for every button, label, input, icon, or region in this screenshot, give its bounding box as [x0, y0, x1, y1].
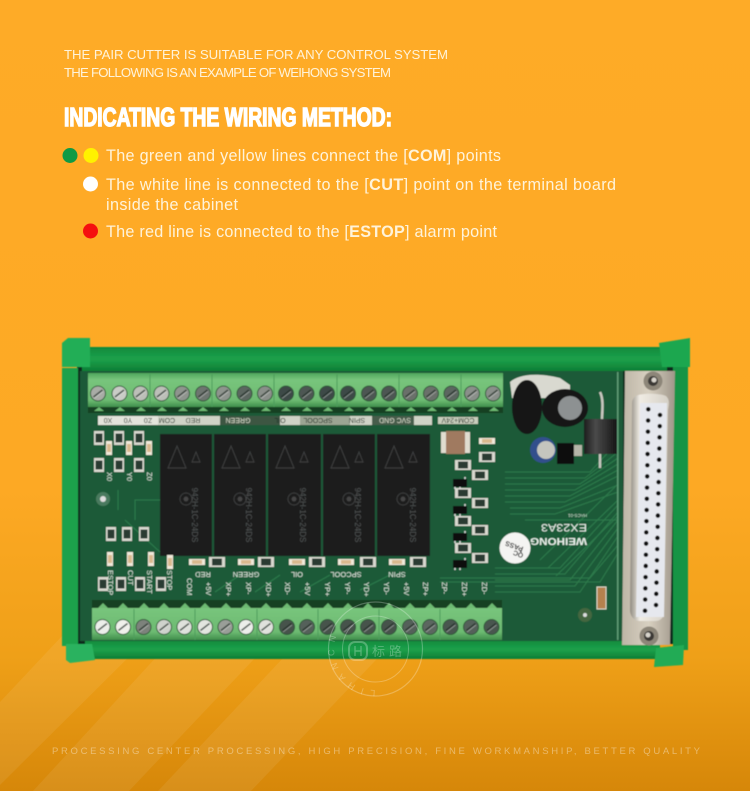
board side labels: YP+	[323, 582, 332, 597]
top label strip: RED	[186, 416, 200, 423]
diode	[584, 419, 617, 454]
pins	[645, 409, 648, 611]
board side labels: STOP	[165, 570, 174, 590]
board side labels: ZP+	[421, 582, 430, 597]
board side labels: X0	[105, 472, 114, 481]
text: red line: The red line is connected to the [ESTOP] alarm point	[106, 223, 498, 241]
board side labels: COM	[185, 578, 194, 596]
text: white line	[106, 176, 616, 214]
white glue	[510, 375, 570, 398]
heading: INDICATING THE WIRING METHOD:	[64, 102, 392, 132]
bottom terminal block	[92, 600, 502, 640]
relays: 942H-1C-24DS	[190, 488, 199, 542]
top label strip	[98, 416, 498, 425]
relays	[160, 434, 430, 556]
board side labels: OIL	[291, 570, 303, 579]
capacitor large	[542, 389, 588, 427]
board side labels: XD-	[283, 582, 292, 595]
relays: 942H-1C-24DS	[244, 488, 253, 542]
connector shell	[630, 394, 669, 621]
board side labels: SPCOOL	[330, 570, 362, 579]
board side labels: START	[145, 570, 154, 594]
board side labels: Y0	[125, 472, 134, 481]
board side labels: Z0	[145, 472, 154, 481]
board side labels: ESTOP	[106, 570, 115, 595]
board side labels	[105, 472, 489, 597]
top label strip: X0	[104, 416, 112, 423]
item: green and yellow lines	[62, 147, 501, 165]
top label strip: SVC GND	[379, 416, 411, 423]
icon: red dot	[83, 224, 98, 238]
power components	[510, 375, 617, 468]
board side labels: +5V	[204, 582, 213, 596]
icon: green dot	[62, 148, 78, 163]
black coil	[512, 380, 542, 434]
teeth	[94, 407, 499, 411]
sticker: QC PASS: PASS	[504, 539, 524, 552]
small electrolytic	[530, 437, 556, 463]
board side labels: ZP-	[440, 582, 449, 595]
board side labels: ZD+	[460, 582, 469, 597]
mounting screws	[644, 372, 662, 390]
board side labels: XP+	[224, 582, 233, 597]
relays: 942H-1C-24DS	[353, 488, 362, 542]
board side labels: RED	[195, 570, 211, 579]
board side labels: XP-	[244, 582, 253, 595]
screws	[94, 619, 500, 635]
top label strip: Y0	[124, 416, 132, 423]
intro text: THE PAIR CUTTER IS SUITABLE FOR ANY CONTROL SYSTEM	[64, 47, 448, 62]
tagline: PROCESSING CENTER PROCESSING, HIGH PRECISION, FINE WORKMANSHIP, BETTER QUALITY	[52, 746, 701, 757]
board logo: EX23A3	[541, 521, 587, 533]
board side labels: YD+	[362, 582, 371, 597]
wiring list	[62, 147, 616, 241]
circuit board	[80, 371, 623, 641]
board side labels: ZD-	[480, 582, 489, 595]
small components	[94, 431, 606, 622]
watermark stamp	[328, 601, 424, 697]
intro text: THE FOLLOWING IS AN EXAMPLE OF WEIHONG SYSTEM	[64, 65, 391, 80]
sticker: QC PASS	[500, 532, 530, 564]
relays: 942H-1C-24DS	[408, 488, 417, 542]
text: white line: The white line is connected to the [CUT] point on the terminal board	[106, 176, 616, 194]
text: white line: inside the cabinet	[106, 196, 238, 214]
top label strip: SPCOOL	[303, 416, 333, 423]
board logo: HACS-01	[567, 513, 587, 518]
green din rail frame	[62, 338, 690, 667]
text: green and yellow lines: The green and yellow lines connect the [COM] points	[106, 147, 501, 165]
screws	[90, 386, 501, 402]
board side labels: GREEN	[233, 570, 259, 579]
top label strip: COM+24V	[441, 416, 474, 423]
SMD chip	[557, 443, 574, 464]
top label strip: Z0	[144, 416, 152, 423]
icon: white dot	[83, 176, 98, 192]
decorative diagonal bands	[0, 636, 395, 791]
intro text	[64, 47, 448, 80]
board side labels: +5V	[402, 582, 411, 596]
board side labels: SPIN	[388, 570, 406, 579]
D-sub connector	[622, 371, 675, 646]
board side labels: XD+	[264, 582, 273, 597]
board traces	[118, 445, 618, 592]
board side labels: CUT	[126, 570, 135, 586]
board side labels: YD-	[382, 582, 391, 595]
teeth	[98, 603, 497, 608]
board side labels: +5V	[303, 582, 312, 596]
board logo: WEIHONG	[530, 535, 587, 547]
icon: yellow dot	[84, 148, 98, 163]
top label strip: OIL	[274, 416, 286, 423]
top terminal block	[88, 373, 503, 413]
relays: 942H-1C-24DS	[298, 488, 307, 542]
top label strip: GREEN	[226, 416, 250, 423]
top label strip: SPIN	[349, 416, 365, 423]
board side labels: YP-	[343, 582, 352, 595]
board logo	[500, 513, 587, 564]
watermark stamp: 标路	[372, 644, 402, 659]
watermark stamp: L I H A N C N C	[328, 636, 375, 696]
item: white line	[83, 176, 616, 214]
item: red line	[83, 223, 498, 241]
top label strip: COM	[159, 416, 175, 423]
sticker: QC PASS: QC	[512, 548, 525, 558]
terminal board photo	[62, 338, 690, 667]
